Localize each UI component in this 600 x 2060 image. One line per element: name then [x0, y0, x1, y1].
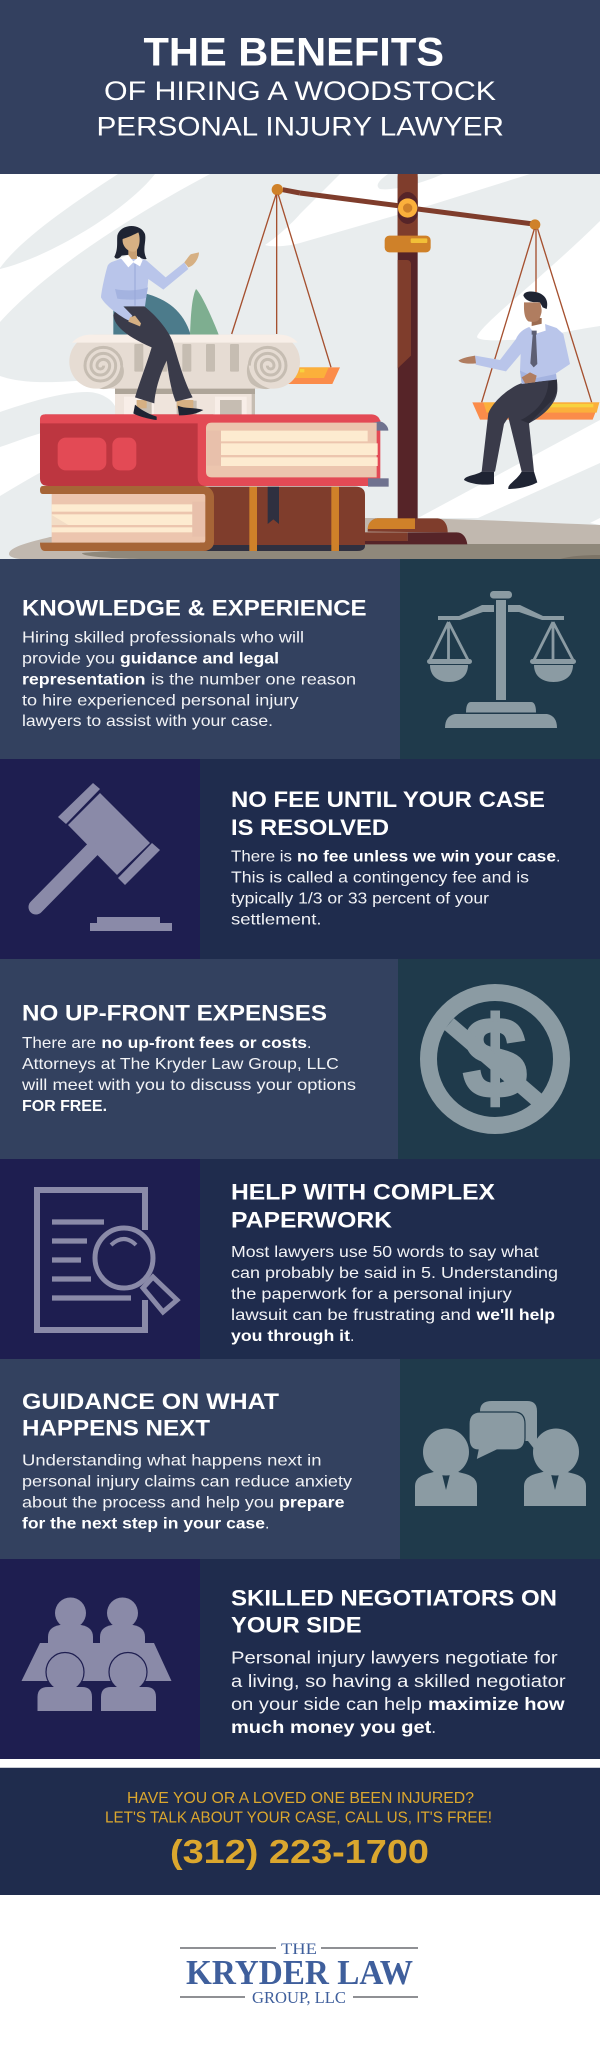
body text: to hire experienced personal injury	[22, 692, 298, 709]
body text: guidance and legal	[120, 650, 279, 667]
body text	[231, 1648, 566, 1737]
body text: FOR FREE.	[22, 1098, 107, 1115]
body text: typically 1/3 or 33 percent of your	[231, 891, 490, 908]
body text: about the process and help you	[22, 1494, 274, 1511]
man sitting on scale pan	[458, 292, 570, 489]
subtitle: OF HIRING A WOODSTOCK	[104, 76, 496, 106]
body text: .	[431, 1717, 436, 1737]
call to action text	[105, 1790, 492, 1827]
heading	[231, 787, 545, 840]
phone number: (312) 223-1700	[170, 1833, 429, 1870]
woman sitting on column	[101, 226, 203, 420]
body text: no fee unless we win your case	[297, 849, 556, 866]
logo: The Kryder Law Group, LLC	[180, 1941, 418, 2007]
body text: .	[556, 849, 560, 866]
body text: can probably be said in 5. Understanding	[231, 1265, 558, 1282]
ground shadow	[9, 518, 600, 559]
stand base	[362, 518, 467, 544]
body text	[21, 1035, 356, 1115]
body text: .	[265, 1515, 269, 1532]
body text: Hiring skilled professionals who will	[22, 629, 304, 646]
heading	[231, 1179, 495, 1232]
body text	[22, 629, 356, 730]
heading: KNOWLEDGE & EXPERIENCE	[22, 595, 367, 620]
body text: maximize how	[428, 1694, 565, 1714]
body text: you through it	[231, 1328, 351, 1345]
title: THE BENEFITS	[144, 30, 444, 74]
heading: YOUR SIDE	[231, 1613, 362, 1638]
body text: lawyers to assist with your case.	[22, 713, 273, 730]
body text: Understanding what happens next in	[22, 1452, 322, 1469]
plant and column capital	[69, 287, 300, 416]
heading: PAPERWORK	[231, 1207, 392, 1232]
body text: much money you get	[231, 1717, 431, 1737]
call to action banner	[0, 1767, 600, 1895]
subtitle	[96, 76, 504, 142]
scale stand	[283, 174, 599, 521]
body text: for the next step in your case	[22, 1515, 265, 1532]
heading: NO UP-FRONT EXPENSES	[22, 1000, 327, 1025]
body text: Attorneys at The Kryder Law Group, LLC	[22, 1056, 339, 1073]
body text: There is	[231, 849, 292, 866]
body text: the paperwork for a personal injury	[231, 1286, 512, 1303]
subtitle: PERSONAL INJURY LAWYER	[96, 112, 504, 142]
icon: no dollar sign: $	[463, 995, 527, 1122]
body text: we'll help	[475, 1307, 555, 1324]
lower brown book	[40, 486, 365, 551]
body text: Most lawyers use 50 words to say what	[231, 1244, 539, 1261]
body text: lawsuit can be frustrating and	[231, 1307, 471, 1324]
panel: knowledge and experience	[0, 559, 600, 759]
body text: Personal injury lawyers negotiate for	[231, 1648, 558, 1668]
heading: NO FEE UNTIL YOUR CASE	[231, 787, 545, 812]
body text: no up-front fees or costs	[101, 1035, 307, 1052]
body text: settlement.	[231, 912, 322, 929]
heading: HAPPENS NEXT	[22, 1416, 211, 1441]
call to action text: HAVE YOU OR A LOVED ONE BEEN INJURED?	[127, 1790, 474, 1807]
logo: The Kryder Law Group, LLC: KRYDER LAW	[186, 1953, 413, 1992]
body text: personal injury claims can reduce anxiety	[22, 1473, 352, 1490]
panel: no fee until resolved	[0, 759, 600, 959]
body text: .	[307, 1035, 311, 1052]
header banner	[0, 0, 600, 174]
call to action text: LET'S TALK ABOUT YOUR CASE, CALL US, IT'S FREE!	[105, 1810, 492, 1827]
icon: no dollar sign	[428, 992, 562, 1126]
panel: no up-front expenses	[0, 959, 600, 1159]
body text: .	[350, 1328, 354, 1345]
icon: gavel	[36, 783, 172, 931]
body text	[22, 1452, 352, 1532]
heading: IS RESOLVED	[231, 815, 389, 840]
body text	[231, 849, 560, 929]
body text: This is called a contingency fee and is	[231, 870, 529, 887]
panel: guidance on what happens next	[0, 1359, 600, 1559]
heading: HELP WITH COMPLEX	[231, 1179, 495, 1204]
icon: document with magnifier	[37, 1190, 177, 1330]
heading: GUIDANCE ON WHAT	[22, 1389, 280, 1414]
upper red book	[40, 414, 389, 487]
heading: SKILLED NEGOTIATORS ON	[231, 1586, 557, 1611]
illustration: lawyers on scales of justice and books	[0, 174, 600, 559]
body text	[231, 1244, 558, 1345]
logo: The Kryder Law Group, LLC: THE	[281, 1941, 317, 1958]
body text: on your side can help	[231, 1694, 422, 1714]
icon: scales of justice	[427, 591, 576, 728]
body text: a living, so having a skilled negotiator	[231, 1671, 566, 1691]
body text: representation	[22, 671, 146, 688]
body text: provide you	[22, 650, 115, 667]
icon: negotiation table	[22, 1598, 172, 1711]
icon: two people talking	[415, 1401, 586, 1506]
body text: prepare	[279, 1494, 345, 1511]
panel: help with complex paperwork	[0, 1159, 600, 1359]
heading	[22, 1389, 280, 1441]
logo: The Kryder Law Group, LLC: GROUP, LLC	[252, 1988, 346, 2007]
body text: is the number one reason	[151, 671, 356, 688]
body text: will meet with you to discuss your options	[21, 1077, 356, 1094]
body text: There are	[22, 1035, 96, 1052]
panel: skilled negotiators	[0, 1559, 600, 1759]
heading	[231, 1586, 557, 1638]
books stack	[40, 414, 389, 551]
